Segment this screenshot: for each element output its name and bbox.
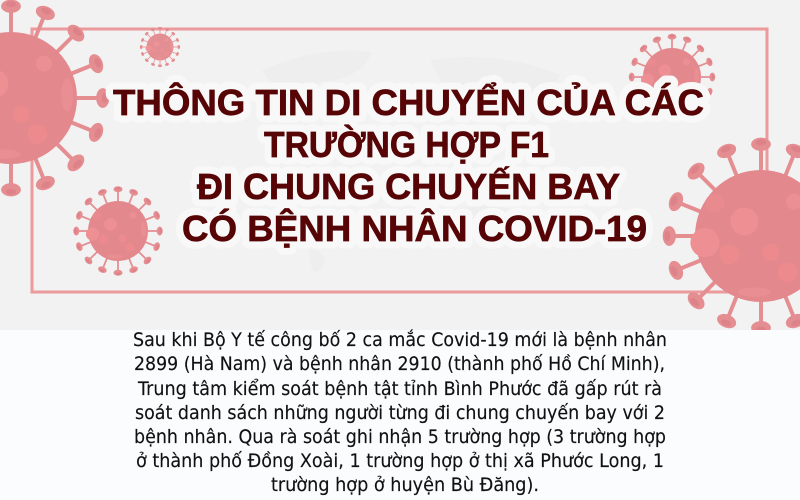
title: ĐI CHUNG CHUYẾN BAY [197,166,620,207]
title: TRƯỜNG HỢP F1 [264,123,549,165]
icon: medium virus lower left [73,186,163,276]
title: TRƯỜNG HỢP F1 [264,123,549,165]
title: ĐI CHUNG CHUYẾN BAY [197,166,620,207]
intro paragraph: trường hợp ở huyện Bù Đăng). [271,474,539,496]
icon: medium virus upper right [629,34,715,120]
icon: large virus top left [0,0,109,196]
intro paragraph: Trung tâm kiểm soát bệnh tật tỉnh Bình Phước đã gấp rút rà [137,378,662,400]
title: CÓ BỆNH NHÂN COVID-19 [182,207,647,249]
header background [0,0,800,330]
faint world map [262,50,560,272]
title [113,81,704,249]
intro paragraph: ở thành phố Đồng Xoài, 1 trường hợp ở thị xã Phước Long, 1 [136,450,664,472]
intro paragraph: bệnh nhân. Qua rà soát ghi nhận 5 trường hợp (3 trường hợp [134,426,666,448]
intro paragraph: soát danh sách những người từng đi chung chuyến bay với 2 [135,402,665,424]
intro paragraph: Sau khi Bộ Y tế công bố 2 ca mắc Covid-19 mới là bệnh nhân [133,328,667,351]
icon: large virus lower right [663,138,800,334]
decorative frame [32,29,767,292]
icon: small virus top [140,27,180,67]
title: CÓ BỆNH NHÂN COVID-19 [182,207,647,249]
title: THÔNG TIN DI CHUYỂN CỦA CÁC [113,81,704,123]
title: THÔNG TIN DI CHUYỂN CỦA CÁC [113,81,704,123]
intro paragraph [133,328,667,496]
intro paragraph: 2899 (Hà Nam) và bệnh nhân 2910 (thành phố Hồ Chí Minh), [134,353,665,375]
